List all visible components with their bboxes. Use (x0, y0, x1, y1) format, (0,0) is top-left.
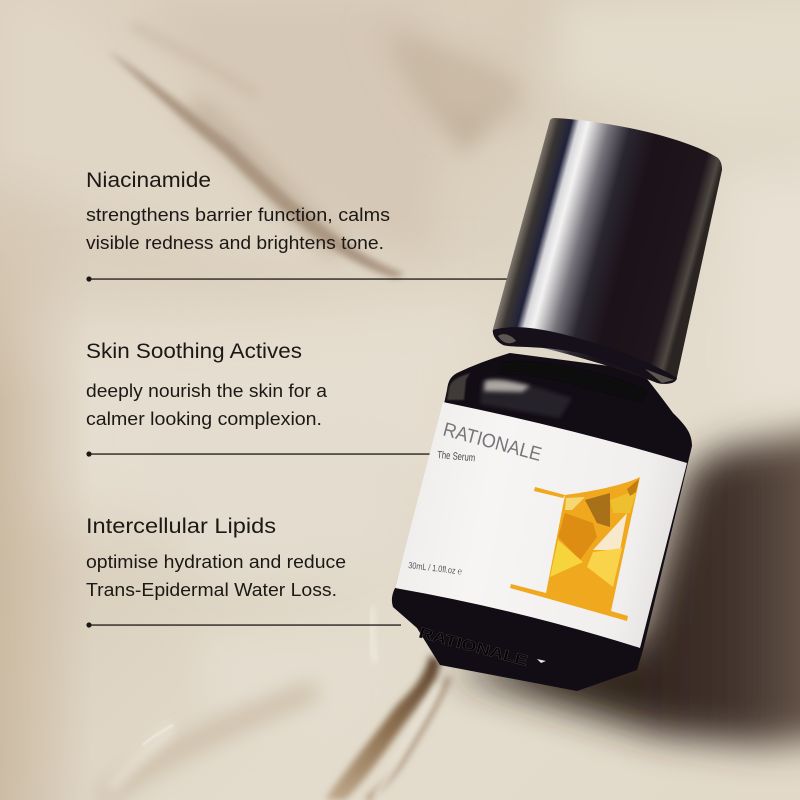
label: Intercellular Lipids: Intercellular Lipids (86, 515, 276, 538)
bottle cap (493, 118, 722, 384)
label: Skin Soothing Actives: deeply nourish the skin for a (86, 381, 328, 401)
label: Niacinamide (86, 169, 507, 282)
shoulder highlights (447, 362, 647, 418)
bottle label (395, 402, 687, 648)
label: Intercellular Lipids (86, 515, 401, 628)
label: Skin Soothing Actives (86, 340, 431, 457)
bottle base embossing: RATIONALE (417, 624, 530, 670)
bottle (392, 118, 722, 691)
product name: The Serum (437, 449, 476, 464)
gold numeral 1 (510, 477, 640, 621)
label: Niacinamide: visible redness and brightens tone. (86, 233, 384, 253)
base highlight (537, 659, 546, 663)
bottle cast shadow (450, 420, 800, 745)
label: Niacinamide: strengthens barrier function, calms (86, 205, 390, 225)
label: Skin Soothing Actives: calmer looking complexion. (86, 409, 322, 429)
bottle body (392, 353, 692, 691)
label: Intercellular Lipids: Trans-Epidermal Water Loss. (86, 580, 337, 600)
brand name: RATIONALE (441, 419, 544, 466)
label: Intercellular Lipids: optimise hydration and reduce (86, 552, 346, 572)
volume text: 30mL / 1.0fl.oz ℮ (408, 560, 463, 577)
label: Skin Soothing Actives: Skin Soothing Actives (86, 340, 302, 363)
label: Niacinamide: Niacinamide (86, 169, 211, 192)
